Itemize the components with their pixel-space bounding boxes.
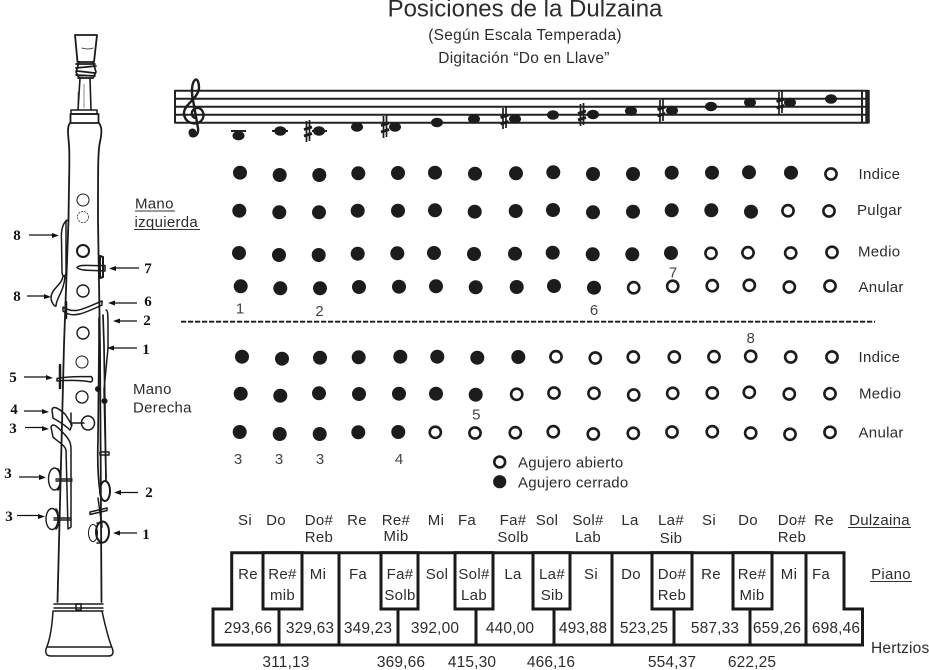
piano note names: Re <box>238 566 258 583</box>
legend: Agujero abierto <box>518 454 623 472</box>
row: Dulzaina note names: Re# <box>382 512 411 529</box>
piano note names: Re# <box>268 566 297 583</box>
row: Dulzaina note names: Sol <box>536 512 558 529</box>
row: Dulzaina note names: Fa# <box>500 512 527 529</box>
key numbers: 8 <box>747 330 755 347</box>
reed and staple <box>75 35 97 110</box>
piano note names <box>238 566 830 604</box>
piano note names: mib <box>270 587 295 604</box>
frequencies of natural keys <box>224 620 860 637</box>
frequencies of natural keys: 493,88 <box>559 620 607 637</box>
divider between hands <box>181 321 875 323</box>
frequencies of sharp keys <box>262 654 776 670</box>
row: Anular left hand <box>234 279 836 295</box>
key numbers: 1 <box>236 300 244 318</box>
piano note names: Fa <box>349 566 367 583</box>
row: Indice left hand <box>233 165 837 182</box>
row: Dulzaina note names: Fa <box>458 512 476 529</box>
arrows with key numbers: 7 <box>144 261 152 277</box>
arrows with key numbers: 1 <box>142 527 150 543</box>
subtitle: fingering: Digitación “Do en Llave” <box>438 50 610 67</box>
row: Dulzaina note names: Mib <box>383 528 409 545</box>
piano note names: Re# <box>738 566 767 583</box>
label: Mano izquierda: Mano <box>135 196 174 212</box>
row: Dulzaina note names: Reb <box>305 529 333 546</box>
label: Anular upper: Anular <box>858 279 904 296</box>
row: Dulzaina note names: Do# <box>305 512 334 529</box>
row: Dulzaina note names: Si <box>702 512 716 529</box>
frequencies of natural keys: 523,25 <box>620 620 668 637</box>
arrows with key numbers: 5 <box>9 370 17 386</box>
arrows with key numbers: 8 <box>13 289 21 305</box>
key numbers: 3 <box>275 451 283 468</box>
arrows with key numbers: 8 <box>13 228 21 244</box>
piano note names: Mi <box>310 566 326 583</box>
label: Mano izquierda <box>134 196 200 231</box>
piano note names: Solb <box>384 587 416 604</box>
row: Dulzaina note names: La# <box>658 512 684 529</box>
label: Mano Derecha: Mano <box>133 381 172 398</box>
piano note names: Mib <box>739 587 765 604</box>
legend: Agujero cerrado <box>518 474 628 492</box>
arrows with key numbers: 1 <box>142 342 150 358</box>
row: Dulzaina note names: Do <box>738 512 758 529</box>
piano note names: Lab <box>461 587 487 604</box>
piano keyboard <box>213 552 862 646</box>
icon: treble clef <box>184 79 203 136</box>
key numbers: 6 <box>590 302 598 319</box>
row: Pulgar <box>232 203 835 219</box>
row: Dulzaina note names: Mi <box>428 512 444 529</box>
key numbers <box>234 264 755 468</box>
arrows with key numbers <box>4 228 153 543</box>
row: Dulzaina note names: Lab <box>575 529 601 546</box>
row: Medio right hand <box>234 386 836 403</box>
key numbers: 5 <box>472 406 480 424</box>
row: Dulzaina note names: Reb <box>778 529 806 546</box>
frequencies of natural keys: 329,63 <box>286 620 334 637</box>
arrows with key numbers: 4 <box>10 402 18 418</box>
row: Dulzaina note names: Re <box>347 512 367 529</box>
sharps <box>304 91 784 142</box>
piano note names: Reb <box>658 587 686 604</box>
row: Medio left hand <box>232 246 838 262</box>
piano note names: Do# <box>658 566 687 583</box>
label: Pulgar: Pulgar <box>857 202 902 219</box>
panel: right hand fingering <box>233 350 838 441</box>
arrows with key numbers: 3 <box>9 421 17 437</box>
body <box>58 110 102 602</box>
frequencies of natural keys: 698,46 <box>812 620 860 637</box>
label: Mano Derecha: Derecha <box>133 400 192 416</box>
sharp keys <box>263 553 772 609</box>
piano note names: Mi <box>781 566 797 583</box>
notes <box>232 94 837 140</box>
row: Dulzaina note names: Sib <box>660 530 682 547</box>
row: Dulzaina note names: Solb <box>497 529 529 546</box>
label: Dulzaina: Dulzaina <box>849 512 910 529</box>
piano note names: Do <box>621 566 641 583</box>
label: Indice upper: Indice <box>858 166 900 183</box>
arrows with key numbers: 6 <box>144 294 152 310</box>
arrows with key numbers: 2 <box>145 485 153 501</box>
arrows with key numbers: 2 <box>143 313 151 329</box>
arrows with key numbers: 3 <box>4 466 12 482</box>
key numbers: 7 <box>669 264 677 282</box>
key numbers: 2 <box>315 303 324 320</box>
frequencies of natural keys: 659,26 <box>753 620 801 637</box>
frequencies of natural keys: 349,23 <box>344 620 392 637</box>
piano note names: Fa <box>812 566 830 583</box>
label: Piano: Piano <box>871 566 911 583</box>
label: Indice lower: Indice <box>858 349 900 366</box>
label: Medio upper: Medio <box>858 244 900 261</box>
row: Dulzaina note names: Si <box>238 512 252 529</box>
frequencies of natural keys: 293,66 <box>224 620 272 637</box>
piano note names: Sol# <box>458 566 490 583</box>
row: Dulzaina note names <box>238 512 834 547</box>
frequencies of natural keys: 440,00 <box>486 620 534 637</box>
musical staff with notes <box>175 79 868 142</box>
row: Dulzaina note names: Do# <box>778 512 807 529</box>
key numbers: 3 <box>316 451 324 468</box>
key numbers: 4 <box>395 451 403 468</box>
panel: left hand fingering <box>232 165 838 295</box>
piano note names: Sol <box>426 566 448 583</box>
row: Dulzaina note names: Re <box>814 512 834 529</box>
frequencies of natural keys: 587,33 <box>691 620 739 637</box>
label: Mano izquierda: izquierda <box>134 214 198 231</box>
piano note names: Fa# <box>387 566 414 583</box>
label: Hertzios: Hertzios <box>871 640 929 657</box>
legend <box>493 454 628 492</box>
bell <box>46 604 113 656</box>
illustration: dulzaina instrument <box>4 35 153 656</box>
holes <box>76 194 89 403</box>
row: Dulzaina note names: Do <box>266 512 286 529</box>
arrows with key numbers: 3 <box>5 509 13 525</box>
subtitle: scale: (Según Escala Temperada) <box>428 27 622 44</box>
key numbers: 3 <box>234 451 242 468</box>
row: Indice right hand <box>235 350 838 366</box>
row: Anular right hand <box>233 425 836 441</box>
row: Dulzaina note names: Sol# <box>572 512 604 529</box>
piano note names: Re <box>701 566 721 583</box>
label: Medio lower: Medio <box>859 386 901 402</box>
frequencies of natural keys: 392,00 <box>411 620 459 637</box>
row: Dulzaina note names: La <box>621 512 639 529</box>
piano note names: La# <box>539 566 565 583</box>
label: Anular lower: Anular <box>858 425 904 442</box>
key dividers <box>279 552 806 646</box>
keys and levers <box>46 220 110 543</box>
label: Mano Derecha <box>133 381 192 416</box>
piano note names: Sib <box>541 587 563 604</box>
piano note names: Si <box>584 566 598 583</box>
keyboard outline <box>213 553 862 645</box>
piano note names: La <box>504 566 522 583</box>
